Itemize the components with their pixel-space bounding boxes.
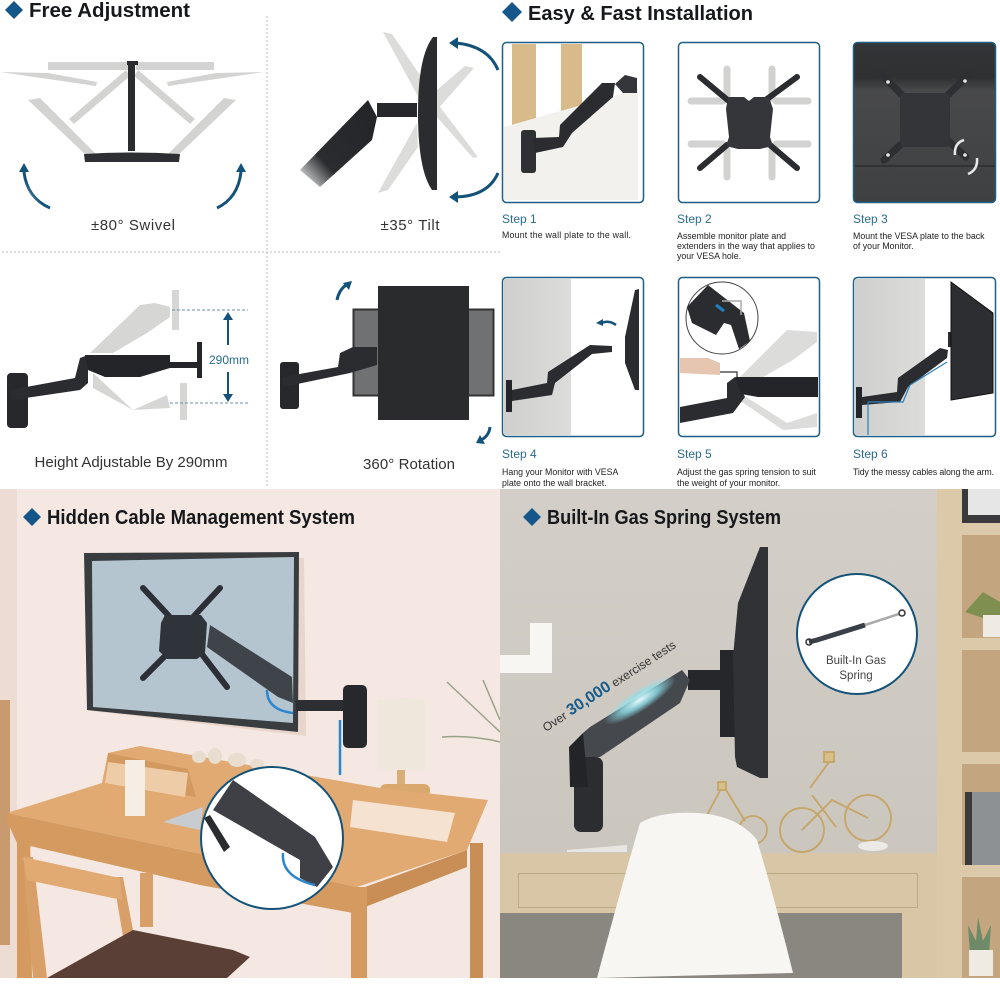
panel: hidden cable management	[0, 489, 500, 978]
step 6	[853, 278, 996, 477]
step 5: Step 5	[677, 447, 712, 461]
step 1: Mount the wall plate to the wall.	[502, 230, 631, 240]
step 3: of your Monitor.	[853, 241, 914, 251]
step 1	[502, 42, 644, 240]
step 4	[502, 278, 644, 488]
desk items	[567, 841, 888, 852]
heading: free adjustment: Free Adjustment	[29, 0, 190, 22]
caption: tilt: ±35° Tilt	[380, 217, 440, 234]
label: 30,000 exercise tests: Over 30,000 exercise tests	[539, 636, 679, 735]
heading: hidden cable management: Hidden Cable Management System	[47, 507, 355, 529]
arm and monitor	[569, 547, 768, 832]
step 4: Step 4	[502, 447, 537, 461]
step 2	[677, 42, 820, 261]
panel: easy and fast installation	[502, 2, 996, 488]
shelves	[937, 489, 1000, 978]
rotation illustration	[280, 281, 494, 444]
desk	[7, 746, 488, 978]
lamp	[377, 698, 430, 797]
panel: free adjustment	[0, 0, 500, 488]
step 5: Adjust the gas spring tension to suit	[677, 467, 816, 477]
caption: rotation: 360° Rotation	[363, 456, 455, 473]
step 3: Step 3	[853, 212, 888, 226]
heading: built-in gas spring: Built-In Gas Spring System	[547, 507, 781, 529]
magnifier: cable	[201, 767, 343, 909]
heading: easy and fast installation: Easy & Fast Installation	[528, 3, 753, 25]
step 2: your VESA hole.	[677, 251, 741, 261]
step 6: Tidy the messy cables along the arm.	[853, 467, 994, 477]
callout: built-in gas spring: Built-In Gas	[826, 655, 886, 667]
step 1: Step 1	[502, 212, 537, 226]
caption: height: Height Adjustable By 290mm	[34, 454, 228, 471]
swivel illustration	[0, 61, 264, 208]
step 5: the weight of your monitor.	[677, 478, 780, 488]
step 4: plate onto the wall bracket.	[502, 478, 607, 488]
step 2: extenders in the way that applies to	[677, 241, 815, 251]
step 2: Step 2	[677, 212, 712, 226]
height illustration	[7, 290, 249, 428]
callout: built-in gas spring	[797, 574, 917, 694]
step 3	[853, 42, 996, 251]
chair	[597, 813, 793, 978]
desk objects	[125, 748, 264, 816]
step 2: Assemble monitor plate and	[677, 231, 786, 241]
panel: gas spring system	[500, 489, 1000, 978]
step 4: Hang your Monitor with VESA	[502, 467, 618, 477]
caption: swivel: ±80° Swivel	[91, 217, 175, 234]
height illustration: 290mm	[209, 353, 249, 367]
monitor with arm	[84, 552, 367, 775]
step 5	[677, 278, 820, 488]
tilt illustration	[300, 32, 498, 203]
callout: built-in gas spring: Spring	[839, 670, 873, 682]
plant	[442, 680, 500, 742]
step 6: Step 6	[853, 447, 888, 461]
chair	[23, 857, 250, 978]
decorative bicycles	[707, 752, 891, 852]
step 3: Mount the VESA plate to the back	[853, 231, 985, 241]
